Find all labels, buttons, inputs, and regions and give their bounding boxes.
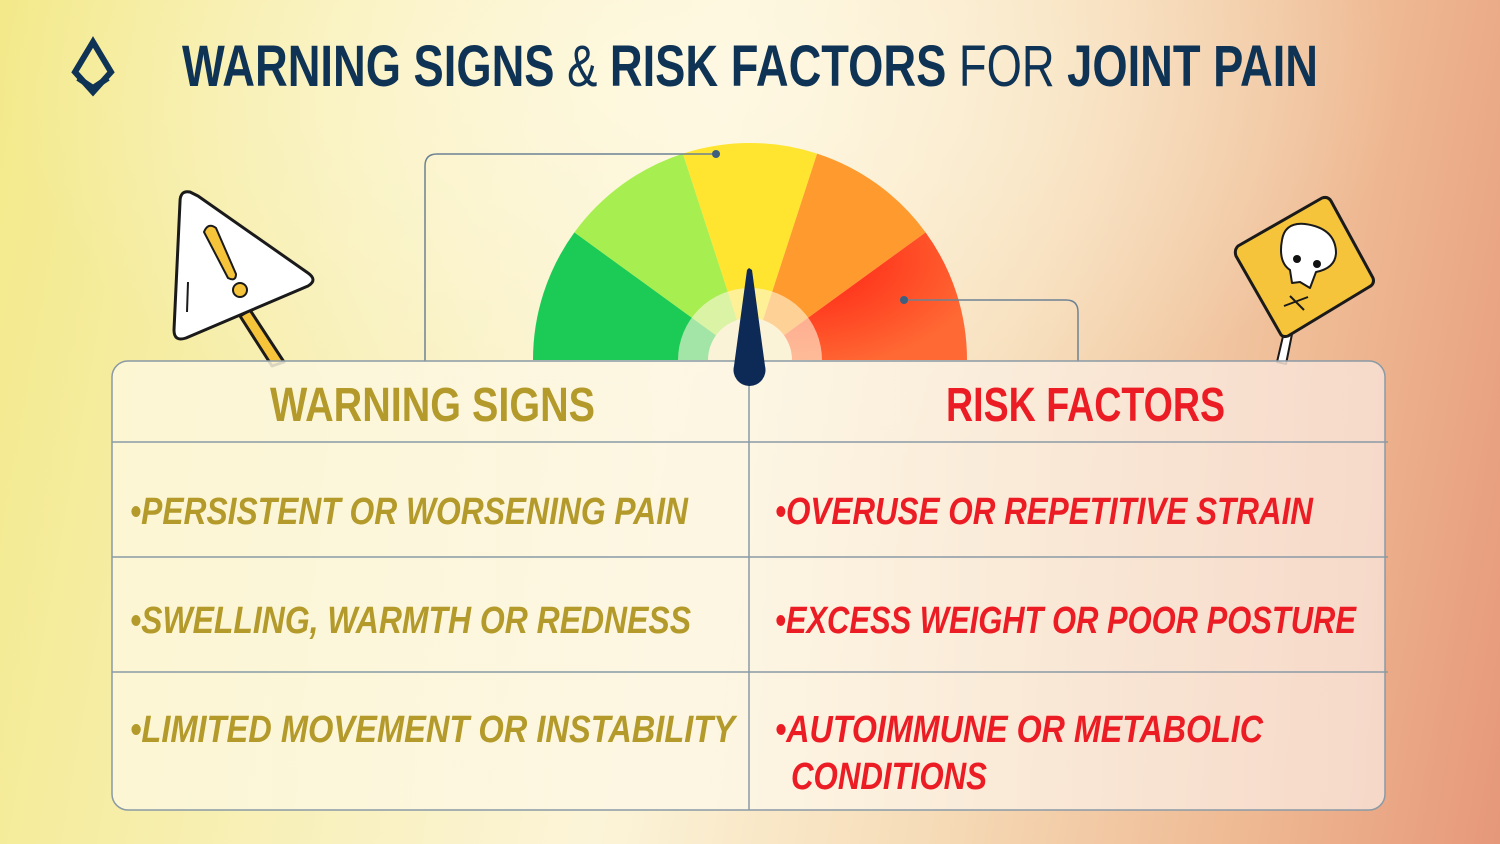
gauge bbox=[533, 143, 967, 360]
heading: warning signs: WARNING SIGNS bbox=[270, 379, 595, 432]
warning signs list: •LIMITED MOVEMENT OR INSTABILITY bbox=[130, 709, 738, 751]
title: WARNING SIGNS & RISK FACTORS FOR JOINT PAIN bbox=[182, 34, 1318, 99]
table panel bbox=[112, 361, 1388, 810]
icon: warning sign bbox=[174, 192, 313, 366]
connector lines bbox=[425, 150, 1078, 362]
heading: risk factors: RISK FACTORS bbox=[946, 379, 1225, 432]
icon: skull sign bbox=[1235, 197, 1374, 364]
risk factors list: •OVERUSE OR REPETITIVE STRAIN bbox=[775, 491, 1314, 533]
warning signs list: •PERSISTENT OR WORSENING PAIN bbox=[130, 491, 689, 533]
warning signs list bbox=[130, 491, 738, 751]
risk factors list: •EXCESS WEIGHT OR POOR POSTURE bbox=[775, 600, 1357, 642]
risk factors list: CONDITIONS bbox=[791, 756, 987, 798]
risk factors list bbox=[775, 491, 1357, 798]
risk factors list: •AUTOIMMUNE OR METABOLIC bbox=[775, 709, 1263, 751]
gauge needle bbox=[733, 268, 766, 386]
logo bbox=[75, 42, 111, 92]
warning signs list: •SWELLING, WARMTH OR REDNESS bbox=[130, 600, 691, 642]
